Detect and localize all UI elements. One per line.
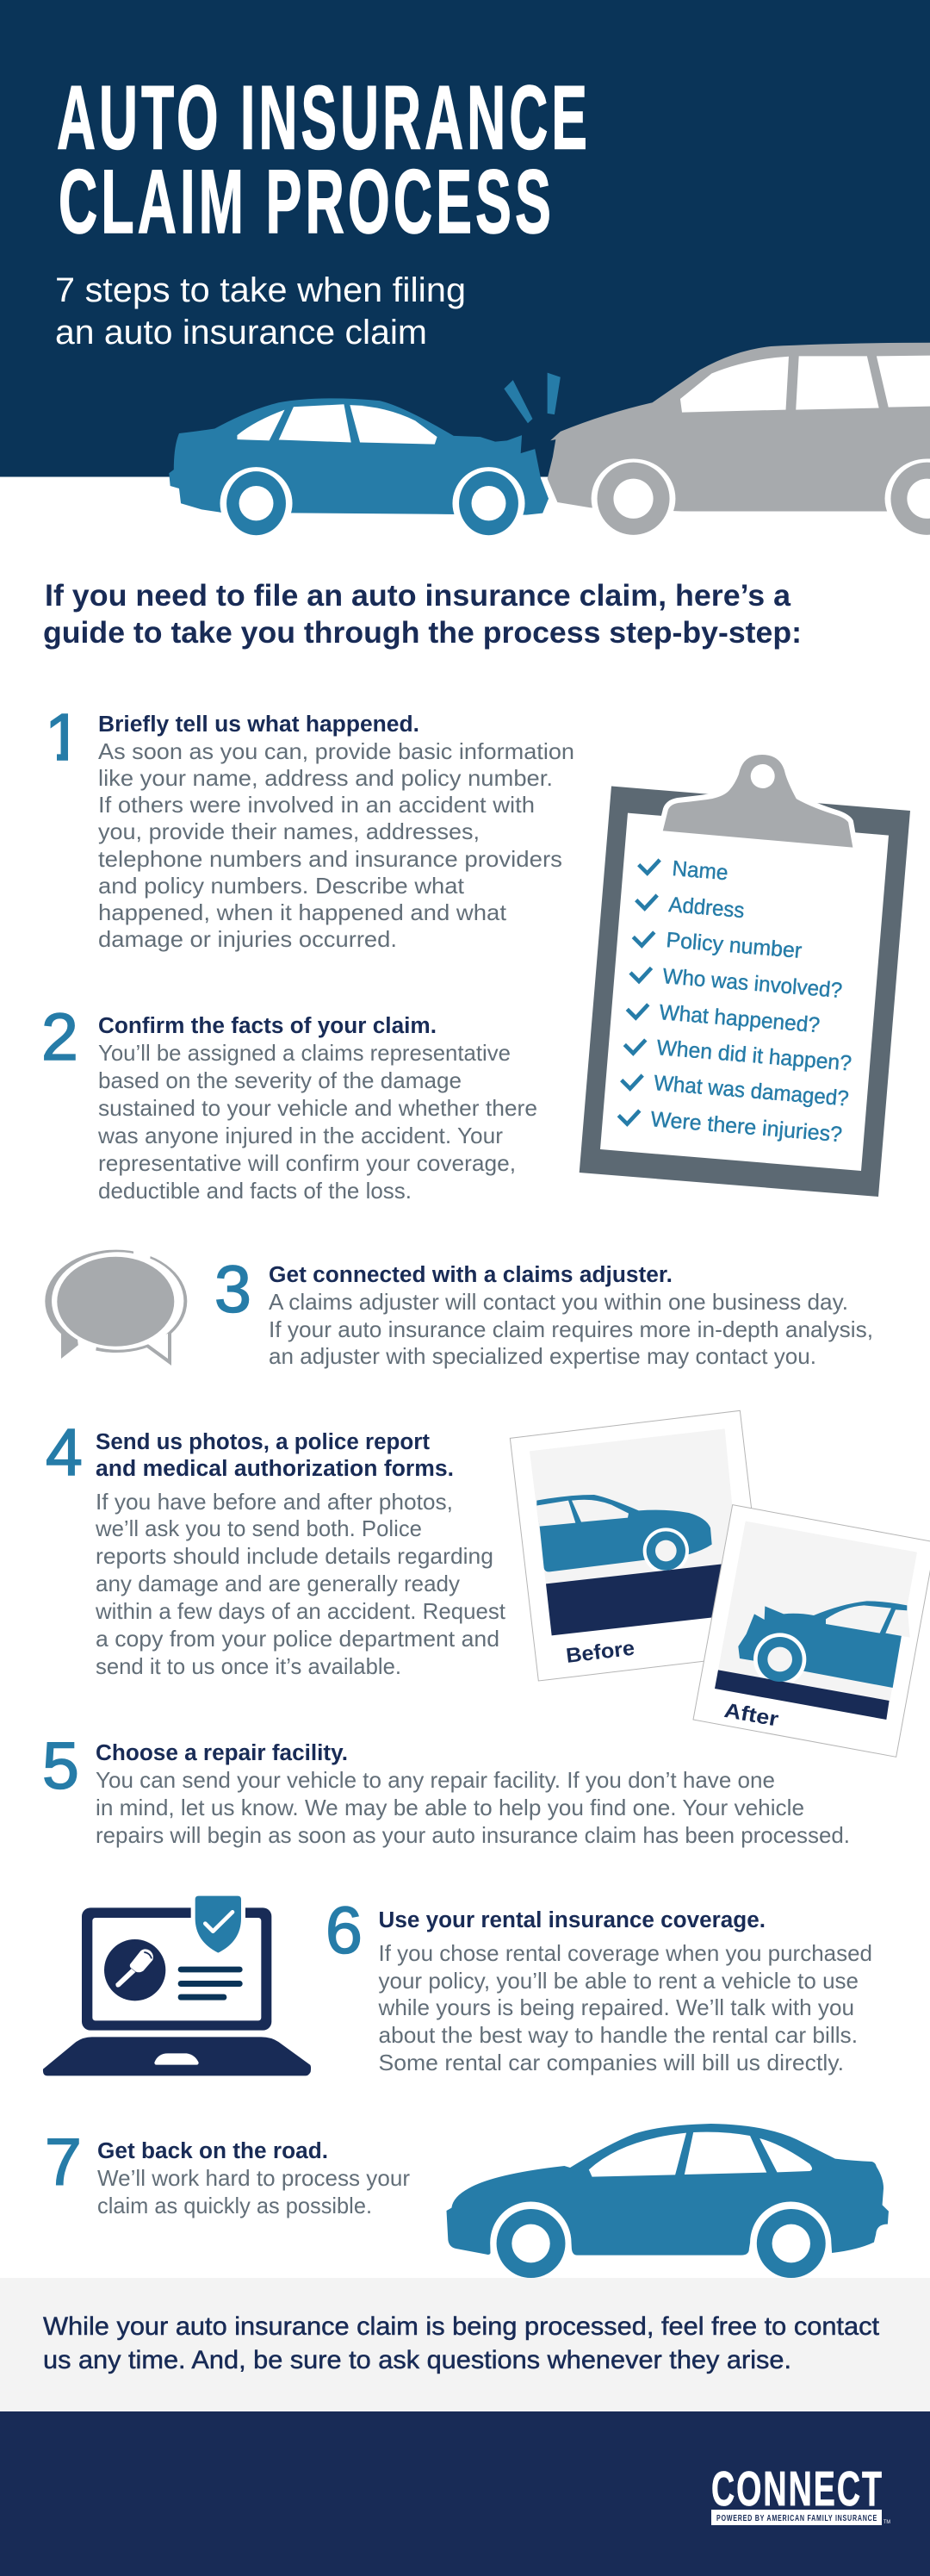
step 4 body: within a few days of an accident. Request xyxy=(95,1598,506,1624)
closing note panel xyxy=(0,2278,930,2411)
step 1 heading: Briefly tell us what happened. xyxy=(98,712,419,737)
step 6 heading: Use your rental insurance coverage. xyxy=(379,1908,766,1932)
step 3 body xyxy=(269,1289,873,1369)
step 7 xyxy=(45,2125,410,2218)
step 3 number: 3 xyxy=(214,1253,251,1327)
step 4 heading: and medical authorization forms. xyxy=(96,1457,454,1481)
step 5 number: 5 xyxy=(42,1729,79,1803)
logo: connect: TM xyxy=(884,2520,890,2525)
step 6 xyxy=(326,1894,872,2075)
title: CLAIM PROCESS xyxy=(59,152,555,252)
before label: Before xyxy=(565,1637,636,1668)
step 4 heading: Send us photos, a police report xyxy=(96,1430,431,1454)
step 4 heading xyxy=(96,1430,454,1481)
step 2 body: sustained to your vehicle and whether there xyxy=(98,1095,537,1121)
step 7 heading: Get back on the road. xyxy=(97,2139,328,2163)
checklist text: What was damaged? xyxy=(653,1071,850,1111)
closing note text: us any time. And, be sure to ask questions whenever they arise. xyxy=(43,2346,791,2374)
step 2 number: 2 xyxy=(41,1000,78,1074)
checklist text: When did it happen? xyxy=(656,1036,852,1076)
clipboard checklist xyxy=(580,752,910,1197)
checklist text: Policy number xyxy=(666,928,803,963)
step 5 heading: Choose a repair facility. xyxy=(96,1741,348,1765)
step 5 body: in mind, let us know. We may be able to help you find one. Your vehicle xyxy=(96,1795,804,1820)
step 1 body: you, provide their names, addresses, xyxy=(98,818,480,844)
step 4 body: send it to us once it’s available. xyxy=(96,1653,401,1679)
step 6 body: while yours is being repaired. We’ll talk with you xyxy=(377,1994,854,2020)
title xyxy=(57,68,591,252)
step 1 body: happened, when it happened and what xyxy=(98,899,507,925)
step 7 number: 7 xyxy=(45,2125,82,2200)
step 4 number: 4 xyxy=(46,1416,83,1490)
after label: After xyxy=(722,1699,780,1732)
icon: laptop with key and shield xyxy=(43,1895,311,2075)
step 2 body: You’ll be assigned a claims representative xyxy=(98,1040,511,1066)
checklist text: Who was involved? xyxy=(662,964,843,1003)
clipboard clip xyxy=(660,752,856,850)
step 4 body: reports should include details regarding xyxy=(96,1543,493,1569)
step 1 body: As soon as you can, provide basic information xyxy=(98,738,574,764)
step 2 body: based on the severity of the damage xyxy=(98,1067,462,1093)
step 6 body: Some rental car companies will bill us directly. xyxy=(379,2050,844,2075)
step 3 body: an adjuster with specialized expertise may contact you. xyxy=(269,1343,816,1369)
checklist text: Were there injuries? xyxy=(650,1107,843,1147)
step 4 body: we’ll ask you to send both. Police xyxy=(95,1515,422,1541)
illustration: car collision xyxy=(169,343,930,539)
step 3 xyxy=(214,1253,873,1369)
checklist text: Name xyxy=(672,856,729,885)
checkmarks xyxy=(618,860,660,1124)
intro heading xyxy=(43,578,802,650)
step 4 body xyxy=(95,1489,506,1679)
before and after photos xyxy=(510,1410,930,1757)
title: AUTO INSURANCE xyxy=(57,68,591,169)
step 1 number: 1 xyxy=(45,700,82,775)
step 1 xyxy=(45,700,574,952)
step 2 heading: Confirm the facts of your claim. xyxy=(98,1014,437,1038)
icon: speech bubbles xyxy=(45,1246,187,1362)
step 1 body: and policy numbers. Describe what xyxy=(98,873,465,899)
blue car xyxy=(169,398,549,539)
step 5 xyxy=(42,1729,850,1848)
step 3 heading: Get connected with a claims adjuster. xyxy=(269,1263,673,1287)
step 4 body: a copy from your police department and xyxy=(96,1626,499,1652)
step 1 body: If others were involved in an accident with xyxy=(98,792,535,818)
subtitle: 7 steps to take when filing xyxy=(55,271,466,309)
step 1 body: damage or injuries occurred. xyxy=(98,926,397,952)
gray car xyxy=(548,343,930,538)
before photo xyxy=(510,1410,768,1681)
step 1 body xyxy=(98,738,574,952)
checklist text: What happened? xyxy=(659,1000,821,1037)
clipboard paper xyxy=(600,813,889,1171)
step 2 body: was anyone injured in the accident. Your xyxy=(97,1123,503,1148)
intro heading: If you need to file an auto insurance claim, here’s a xyxy=(45,578,790,613)
intro heading: guide to take you through the process step-by-step: xyxy=(43,615,802,650)
step 4 xyxy=(46,1416,506,1679)
step 7 body: claim as quickly as possible. xyxy=(97,2193,372,2218)
closing note text: While your auto insurance claim is being processed, feel free to contact xyxy=(43,2312,879,2341)
step 5 body: You can send your vehicle to any repair facility. If you don’t have one xyxy=(96,1767,775,1793)
step 1 body: like your name, address and policy number. xyxy=(98,765,553,791)
hero background xyxy=(0,0,930,477)
closing note text xyxy=(43,2312,879,2374)
subtitle xyxy=(55,271,466,352)
impact marks xyxy=(504,373,561,423)
step 6 body: If you chose rental coverage when you purchased xyxy=(379,1940,872,1966)
step 6 number: 6 xyxy=(326,1894,363,1968)
after photo xyxy=(693,1505,930,1757)
step 6 body: about the best way to handle the rental car bills. xyxy=(379,2022,858,2048)
step 7 body: We’ll work hard to process your xyxy=(97,2165,410,2191)
step 3 body: If your auto insurance claim requires more in-depth analysis, xyxy=(269,1316,873,1342)
step 4 body: If you have before and after photos, xyxy=(96,1489,453,1515)
step 2 xyxy=(41,1000,537,1204)
footer band xyxy=(0,2411,930,2576)
step 2 body xyxy=(97,1040,537,1204)
step 2 body: representative will confirm your coverage, xyxy=(98,1150,516,1176)
icon: blue car xyxy=(446,2124,889,2278)
step 2 body: deductible and facts of the loss. xyxy=(98,1178,412,1204)
step 3 body: A claims adjuster will contact you within one business day. xyxy=(269,1289,848,1315)
step 6 body xyxy=(377,1940,872,2075)
checklist text xyxy=(650,856,852,1147)
step 6 body: your policy, you’ll be able to rent a vehicle to use xyxy=(379,1968,859,1994)
clipboard board xyxy=(580,786,910,1197)
step 5 body xyxy=(96,1767,850,1848)
step 1 body: telephone numbers and insurance providers xyxy=(98,846,562,872)
step 4 body: any damage and are generally ready xyxy=(96,1571,460,1596)
step 7 body xyxy=(97,2165,410,2218)
checklist text: Address xyxy=(668,893,746,923)
subtitle: an auto insurance claim xyxy=(55,314,427,352)
step 5 body: repairs will begin as soon as your auto insurance claim has been processed. xyxy=(96,1822,850,1848)
